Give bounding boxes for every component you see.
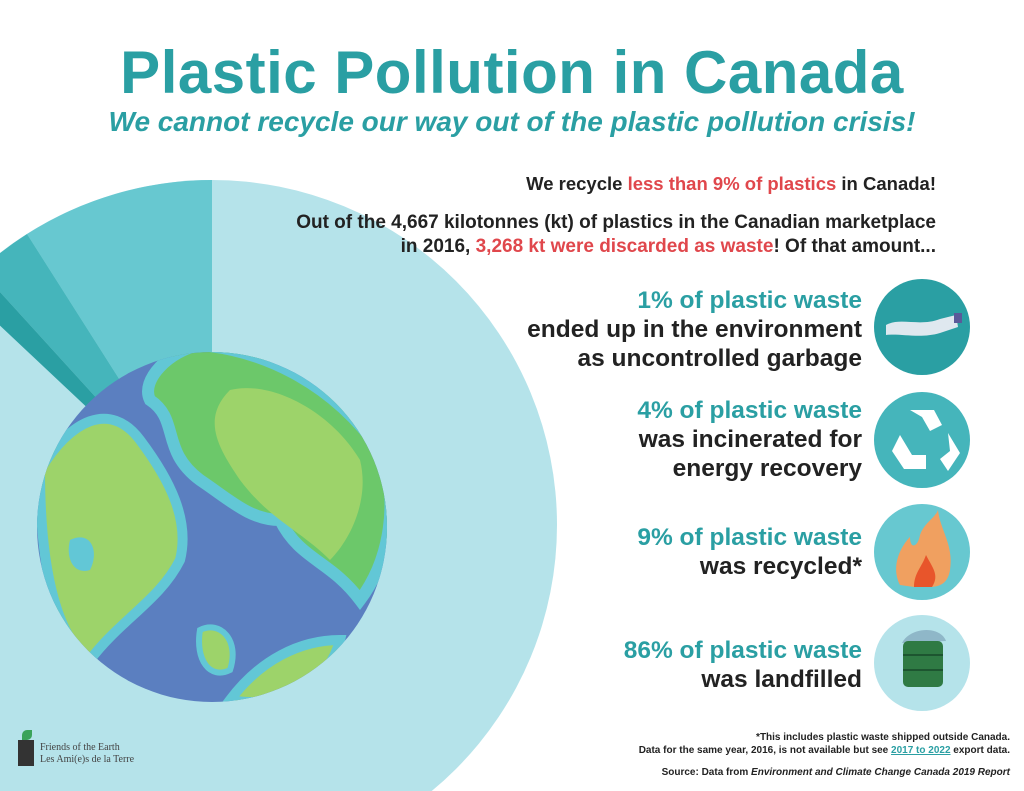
stat: 4% incinerated bbox=[637, 397, 862, 482]
stat: 86% landfilled: was landfilled bbox=[701, 666, 862, 693]
stat: 1% environment: 1% of plastic waste bbox=[637, 287, 862, 314]
pie slice: 9% recycled bbox=[27, 180, 212, 525]
stat: 9% recycled: 9% of plastic waste bbox=[637, 524, 862, 551]
stat: 4% incinerated: energy recovery bbox=[673, 455, 862, 482]
pie slice: 4% incinerated bbox=[0, 234, 212, 525]
pie slice: 1% environment bbox=[0, 270, 212, 525]
stat: 9% recycled bbox=[637, 524, 862, 580]
footnote: Data for the same year, 2016, is not available but see 2017 to 2022 export data. bbox=[639, 745, 1010, 756]
icon: fire bbox=[874, 504, 970, 600]
icon: recycle symbol bbox=[874, 392, 970, 488]
marketplace text: Out of the 4,667 kilotonnes (kt) of plastics in the Canadian marketplace bbox=[296, 212, 936, 233]
subtitle: We cannot recycle our way out of the plastic pollution crisis! bbox=[109, 106, 915, 137]
logo: Friends of the Earth: Friends of the Earth bbox=[40, 742, 120, 753]
globe bbox=[37, 345, 390, 702]
logo: Friends of the Earth: Les Ami(e)s de la Terre bbox=[40, 754, 134, 765]
footnote bbox=[639, 732, 1010, 756]
intro text: We recycle less than 9% of plastics in Canada! bbox=[526, 173, 936, 194]
stat: 1% environment bbox=[527, 287, 862, 372]
icons bbox=[874, 279, 970, 711]
pie chart with globe bbox=[0, 180, 557, 791]
stat: 4% incinerated: was incinerated for bbox=[639, 426, 862, 453]
stat: 1% environment: ended up in the environment bbox=[527, 316, 862, 343]
stat: 1% environment: as uncontrolled garbage bbox=[577, 345, 862, 372]
icon: crushed bottle bbox=[874, 279, 970, 375]
icon: garbage bin bbox=[874, 615, 970, 711]
source: Source: Data from Environment and Climate Change Canada 2019 Report bbox=[662, 767, 1010, 778]
marketplace text bbox=[296, 212, 936, 257]
stat: 86% landfilled bbox=[624, 637, 862, 693]
footnote: *This includes plastic waste shipped outside Canada. bbox=[756, 732, 1010, 743]
stat: 4% incinerated: 4% of plastic waste bbox=[637, 397, 862, 424]
pie slice: 86% landfilled bbox=[0, 180, 557, 791]
title: Plastic Pollution in Canada bbox=[120, 39, 904, 106]
logo: Friends of the Earth bbox=[18, 730, 134, 766]
stat: 9% recycled: was recycled* bbox=[700, 553, 862, 580]
marketplace text: in 2016, 3,268 kt were discarded as waste! Of that amount... bbox=[401, 236, 936, 257]
stat: 86% landfilled: 86% of plastic waste bbox=[624, 637, 862, 664]
